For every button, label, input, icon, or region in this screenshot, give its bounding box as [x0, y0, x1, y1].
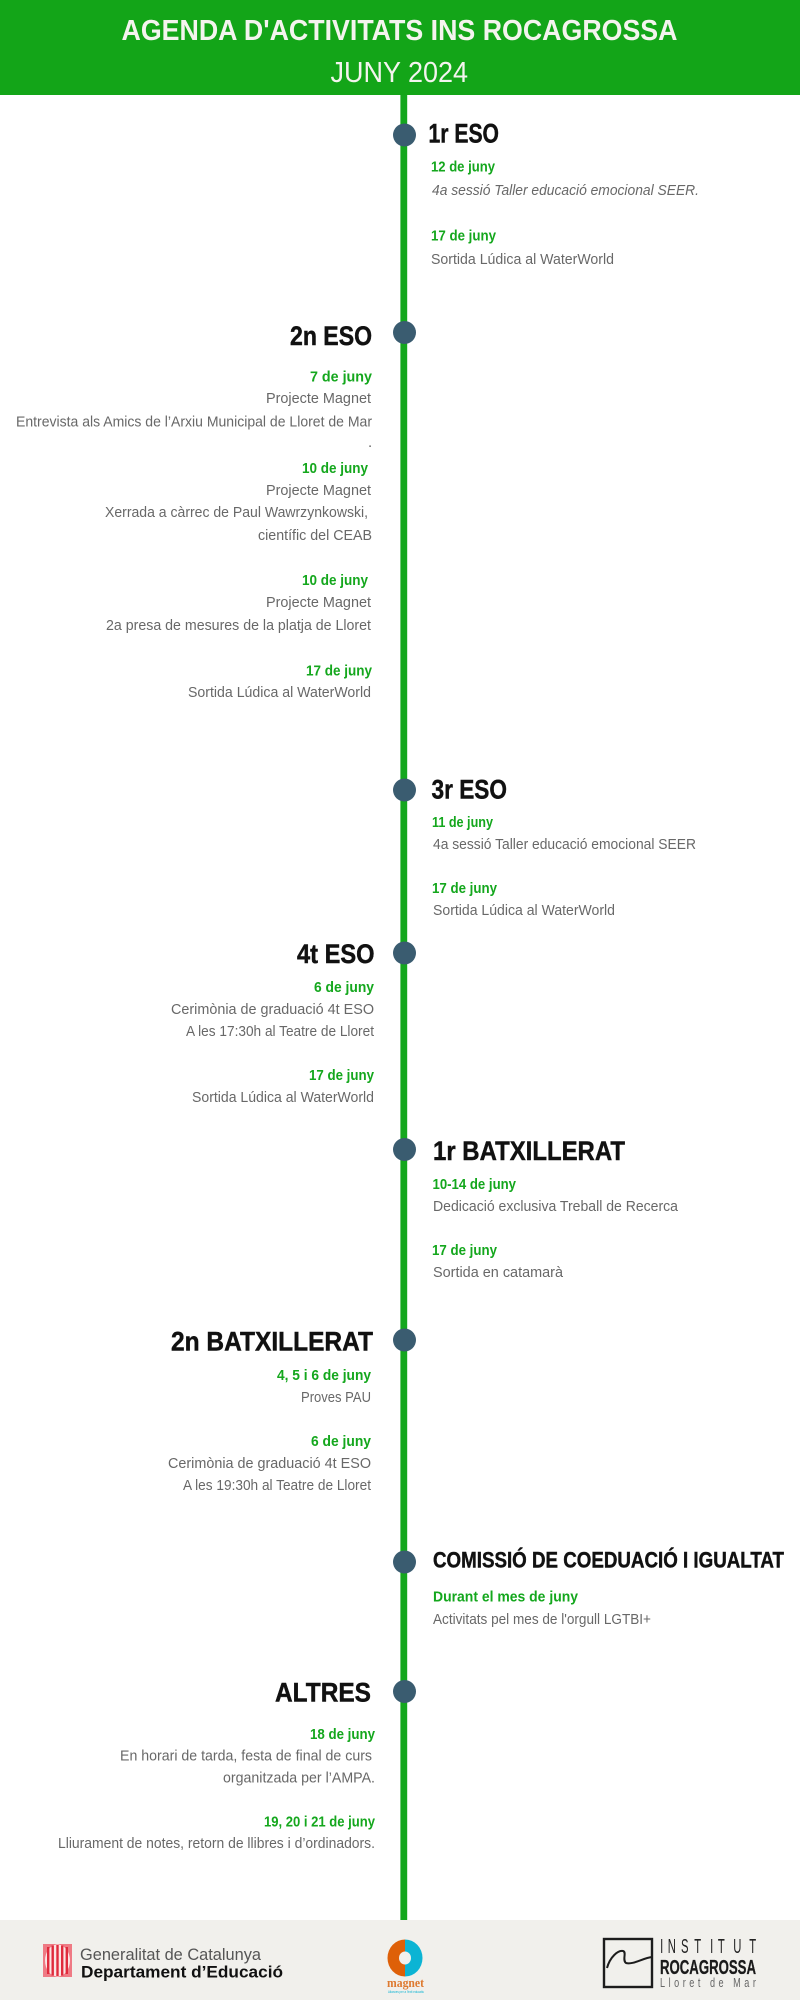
activity: 4a sessió Taller educació emocional SEER. — [432, 182, 699, 199]
activity: Entrevista als Amics de l’Arxiu Municipal de Lloret de Mar — [16, 414, 372, 430]
activity — [105, 482, 372, 544]
activity: 2a presa de mesures de la platja de Lloret — [106, 617, 372, 634]
activity: En horari de tarda, festa de final de curs — [120, 1748, 372, 1765]
heading Altres: ALTRES — [275, 1678, 371, 1708]
activity — [171, 1001, 375, 1040]
date: 18 de juny — [310, 1726, 376, 1743]
activity: Activitats pel mes de l'orgull LGTBI+ — [433, 1611, 651, 1628]
timeline marker 3r ESO — [393, 778, 416, 802]
activity: Sortida Lúdica al WaterWorld — [433, 902, 615, 919]
activity: Cerimònia de graduació 4t ESO — [171, 1001, 374, 1018]
activity: Projecte Magnet — [266, 482, 372, 499]
activity: Xerrada a càrrec de Paul Wawrzynkowski, — [105, 504, 368, 521]
activity — [168, 1455, 372, 1494]
activity: Dedicació exclusiva Treball de Recerca — [433, 1198, 679, 1215]
heading 4t ESO: 4t ESO — [297, 939, 374, 969]
activity: Lliurament de notes, retorn de llibres i d’ordinadors. — [58, 1835, 375, 1852]
footer band — [0, 1920, 800, 2000]
activity: A les 17:30h al Teatre de Lloret — [186, 1023, 375, 1040]
icon: framed squiggle — [604, 1939, 652, 1987]
header banner — [0, 0, 800, 95]
magnet wordmark: magnet — [387, 1975, 425, 1990]
panel: Comissió de Coeducació i Igualtat — [393, 1548, 784, 1628]
activity: Sortida Lúdica al WaterWorld — [188, 684, 371, 701]
panel: 3r ESO — [393, 775, 696, 919]
date: 12 de juny — [431, 159, 496, 176]
date: 17 de juny — [431, 228, 497, 245]
date: 17 de juny — [306, 663, 373, 680]
panel: 1r ESO — [393, 119, 699, 268]
activity: organitzada per l’AMPA. — [223, 1770, 375, 1787]
activity: Projecte Magnet — [266, 390, 372, 407]
activity — [106, 594, 372, 634]
date: 17 de juny — [432, 1242, 498, 1259]
title: AGENDA D'ACTIVITATS INS ROCAGROSSA — [122, 15, 678, 47]
timeline vertical line — [400, 90, 407, 1922]
timeline marker 2n Batxillerat — [393, 1328, 416, 1352]
logo text Lloret de Mar: Lloret de Mar — [660, 1977, 756, 1990]
date: 6 de juny — [311, 1433, 372, 1450]
date: 10 de juny — [302, 460, 369, 477]
activity: Proves PAU — [301, 1389, 371, 1406]
activity: Sortida Lúdica al WaterWorld — [431, 251, 614, 268]
logo: Generalitat de Catalunya — [43, 1944, 283, 1982]
panel: 2n ESO — [16, 321, 416, 701]
timeline marker 1r Batxillerat — [393, 1138, 416, 1161]
logo: Institut Rocagrossa — [604, 1934, 756, 1990]
date: 17 de juny — [432, 880, 498, 897]
heading 3r ESO: 3r ESO — [432, 775, 507, 805]
date: 10-14 de juny — [432, 1176, 517, 1193]
activity — [120, 1748, 375, 1787]
subtitle: JUNY 2024 — [330, 57, 468, 89]
date: 6 de juny — [314, 979, 375, 996]
date: 11 de juny — [432, 814, 494, 831]
activity: A les 19:30h al Teatre de Lloret — [183, 1477, 372, 1494]
timeline marker 1r ESO — [393, 124, 416, 146]
panel: 1r Batxillerat — [393, 1136, 679, 1281]
date: 19, 20 i 21 de juny — [264, 1814, 376, 1831]
logo: Magnet — [387, 1940, 425, 1994]
panel: 2n Batxillerat — [168, 1327, 416, 1494]
date: 17 de juny — [309, 1067, 375, 1084]
timeline marker Comissió — [393, 1550, 416, 1574]
heading 2n ESO: 2n ESO — [290, 321, 372, 351]
timeline marker 2n ESO — [393, 321, 416, 344]
activity: . — [368, 434, 372, 451]
activity: Cerimònia de graduació 4t ESO — [168, 1455, 371, 1472]
date: 7 de juny — [310, 369, 373, 386]
date: 10 de juny — [302, 572, 369, 589]
activity: científic del CEAB — [258, 527, 372, 544]
heading 1r ESO: 1r ESO — [428, 119, 499, 149]
magnet tagline: Aliances per a l'èxit educatiu — [388, 1990, 424, 1994]
panel: 4t ESO — [171, 939, 416, 1106]
logo text line 2: Departament d’Educació — [81, 1963, 283, 1982]
logo text line 1: Generalitat de Catalunya — [80, 1945, 262, 1964]
activity: Projecte Magnet — [266, 594, 372, 611]
timeline marker 4t ESO — [393, 942, 416, 964]
date: 4, 5 i 6 de juny — [277, 1367, 372, 1384]
heading 2n Batxillerat: 2n BATXILLERAT — [171, 1327, 373, 1357]
activity: Sortida en catamarà — [433, 1264, 564, 1281]
icon: magnet ring — [388, 1940, 422, 1976]
date: Durant el mes de juny — [433, 1589, 579, 1606]
icon: Catalan shield — [43, 1944, 72, 1977]
activity — [16, 390, 372, 451]
heading 1r Batxillerat: 1r BATXILLERAT — [433, 1136, 625, 1166]
timeline marker Altres — [393, 1680, 416, 1703]
logo text INSTITUT: INSTITUT — [660, 1934, 756, 1958]
activity: Sortida Lúdica al WaterWorld — [192, 1089, 374, 1106]
panel: Altres — [58, 1678, 416, 1852]
activity: 4a sessió Taller educació emocional SEER — [433, 836, 696, 853]
